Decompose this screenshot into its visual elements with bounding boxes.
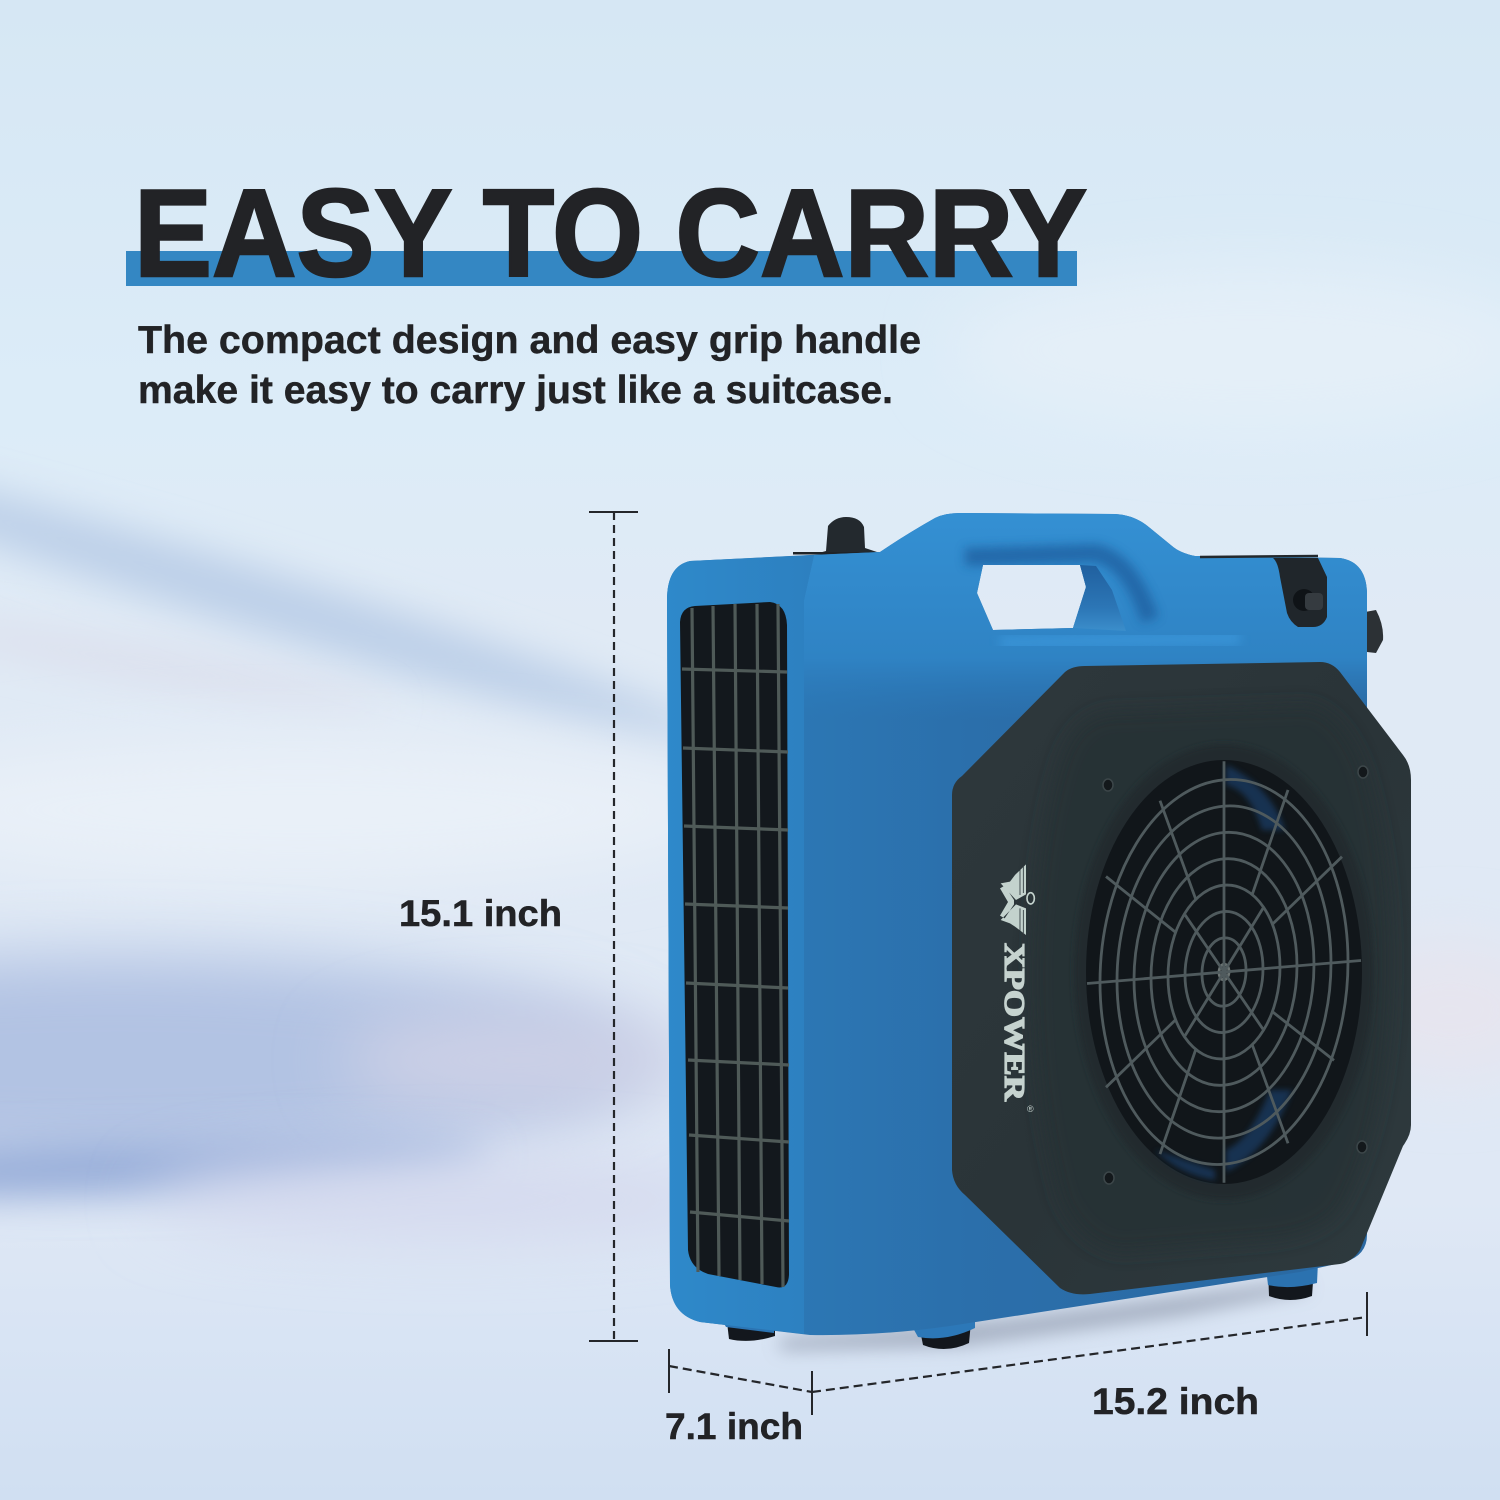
side stub	[1365, 610, 1383, 653]
foot: left rear	[722, 1320, 775, 1341]
title: EASY TO CARRY	[134, 165, 1087, 303]
screws	[1103, 766, 1368, 1184]
dimension: height: 15.1 inch	[399, 893, 562, 934]
side vent grille	[680, 602, 789, 1288]
top knob	[793, 517, 927, 554]
blue housing with handle	[667, 513, 1367, 1335]
dimension: width	[812, 1292, 1367, 1422]
fan opening	[1086, 760, 1362, 1184]
handle inner strut	[1073, 565, 1126, 631]
floor shadow	[780, 1280, 1310, 1350]
fan guard	[1087, 750, 1361, 1194]
brand name: XPOWER	[998, 943, 1029, 1102]
latch and rear knob	[1200, 556, 1327, 627]
dimension: depth: 7.1 inch	[665, 1406, 803, 1447]
subtitle	[138, 319, 921, 412]
foot: front middle	[913, 1314, 975, 1349]
subtitle: The compact design and easy grip handle	[138, 319, 921, 362]
title underline bar	[126, 251, 1077, 286]
brand logo icon	[1000, 864, 1034, 935]
dimension: width: 15.2 inch	[1092, 1381, 1259, 1422]
dimension: depth	[665, 1349, 812, 1447]
air mover product	[667, 513, 1411, 1349]
fan recess	[1074, 744, 1374, 1200]
plate raised panel	[1032, 705, 1391, 1252]
fan blades glimpse	[1155, 765, 1292, 1180]
left side face	[667, 555, 814, 1334]
foot: right rear	[1266, 1262, 1318, 1300]
registered mark: ®	[1027, 1104, 1034, 1114]
black fan plate	[952, 662, 1411, 1294]
handle highlight	[804, 513, 1367, 720]
dimension: height	[399, 512, 638, 1341]
handle shading	[965, 553, 1240, 643]
subtitle: make it easy to carry just like a suitcase.	[138, 369, 893, 412]
